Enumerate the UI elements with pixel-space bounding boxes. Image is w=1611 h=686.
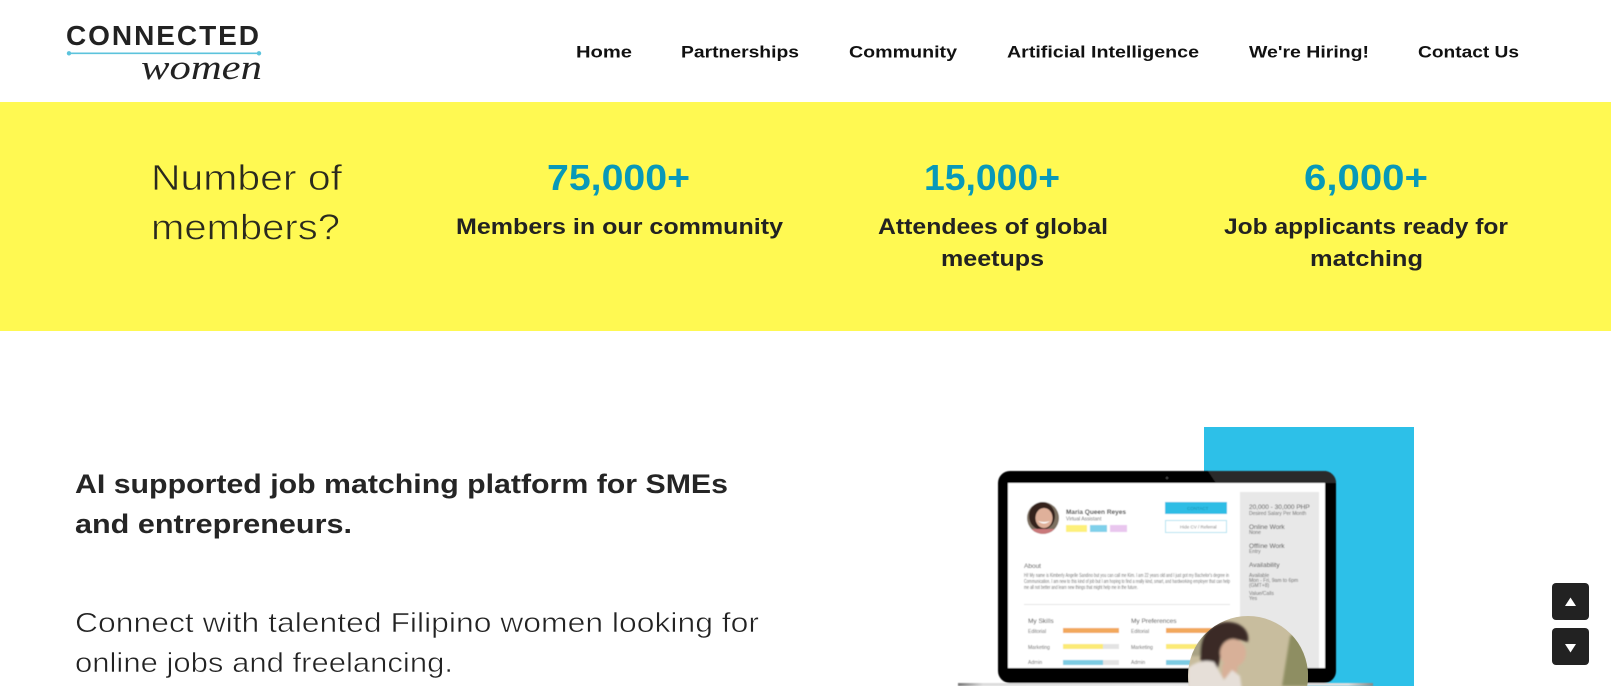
profile name and tags: Maria Queen Reyes — [1066, 509, 1126, 516]
skills and preferences bars: Marketing — [1131, 645, 1153, 651]
navigation menu: Contact Us — [1418, 42, 1519, 62]
text block: connect with Filipino women: Connect with talented Filipino women looking for — [75, 607, 759, 638]
stat: 15,000+ attendees: Attendees of global — [878, 214, 1108, 239]
heading: AI job matching: and entrepreneurs. — [75, 509, 352, 539]
skills and preferences bars: Admin — [1028, 660, 1042, 666]
profile side panel: Availability — [1249, 562, 1280, 569]
profile side panel: Value/Calls — [1249, 591, 1274, 597]
stat: 6,000+ job applicants: Job applicants ready for — [1224, 214, 1508, 239]
scroll to bottom button — [1552, 628, 1589, 665]
panel: yellow stats band — [0, 102, 1611, 331]
profile name and tags — [1066, 509, 1127, 532]
navigation menu: Home — [576, 42, 632, 62]
skills and preferences bars: Admin — [1131, 660, 1145, 666]
navigation menu: Artificial Intelligence — [1007, 42, 1199, 62]
logo: Connected Women: CONNECTED — [66, 20, 259, 51]
stat: 6,000+ job applicants: matching — [1310, 246, 1423, 271]
circular photo: woman working — [1188, 616, 1310, 686]
navigation menu — [576, 42, 1519, 62]
logo: Connected Women — [66, 20, 262, 87]
laptop body — [958, 471, 1373, 686]
stat: 15,000+ attendees: meetups — [941, 246, 1044, 271]
stat: 6,000+ job applicants: 6,000+ — [1304, 157, 1428, 198]
stat: 75,000+ members: Members in our community — [456, 214, 784, 239]
profile side panel: Offline Work — [1249, 543, 1285, 550]
heading: number of members: members? — [151, 206, 340, 248]
contact buttons: Hide CV / Referral — [1180, 524, 1217, 530]
profile side panel: Online Work — [1249, 524, 1285, 531]
navigation menu: We're Hiring! — [1249, 42, 1369, 62]
skills and preferences bars: My Skills — [1028, 618, 1054, 625]
profile side panel: Yes — [1249, 596, 1258, 602]
contact buttons — [1165, 502, 1227, 532]
about section — [1024, 563, 1230, 605]
profile side panel: Entry — [1249, 549, 1261, 555]
profile side panel: 20,000 - 30,000 PHP — [1249, 504, 1310, 511]
skills and preferences bars — [1028, 618, 1222, 666]
text block: connect with Filipino women — [75, 607, 759, 678]
profile side panel: Mon - Fri, 9am to 6pm — [1249, 578, 1298, 584]
navigation menu: Partnerships — [681, 42, 799, 62]
profile photo — [1027, 502, 1059, 535]
about section: About — [1024, 563, 1041, 570]
profile side panel: Desired Salary Per Month — [1249, 511, 1306, 517]
heading: number of members: Number of — [151, 157, 343, 198]
text block: connect with Filipino women: online jobs and freelancing. — [75, 647, 453, 678]
scroll to top button — [1552, 583, 1589, 620]
navigation menu: Community — [849, 42, 958, 62]
skills and preferences bars: Editorial — [1131, 629, 1149, 635]
skills and preferences bars: Editorial — [1028, 629, 1046, 635]
heading: AI job matching: AI supported job matching platform for SMEs — [75, 469, 728, 499]
stat: 15,000+ attendees — [878, 157, 1108, 271]
about section: me all not better and learn new things that might help me in the future. — [1024, 585, 1138, 591]
heading: AI job matching — [75, 469, 728, 539]
about section: Hi! My name is Kimberly Angelle Sandino but you can call me Kim. I am 22 years old and I just got my Bachelor's degree in — [1024, 573, 1229, 579]
stat: 6,000+ job applicants — [1224, 157, 1508, 271]
logo: Connected Women: women — [141, 48, 262, 87]
profile side panel: Available — [1249, 573, 1269, 579]
stat: 75,000+ members: 75,000+ — [547, 157, 690, 198]
profile side panel: None — [1249, 530, 1261, 536]
about section: Communication. I am new to this kind of job but I am hoping to find a really kind, smart, and hardworking employer that can help — [1024, 579, 1230, 585]
skills and preferences bars: Marketing — [1028, 645, 1050, 651]
profile name and tags: Virtual Assistant — [1066, 516, 1102, 522]
profile side panel — [1240, 492, 1319, 668]
stat: 15,000+ attendees: 15,000+ — [924, 157, 1060, 198]
panel: blue backdrop — [1204, 427, 1414, 686]
heading: number of members — [151, 157, 343, 248]
laptop mockup — [958, 471, 1373, 686]
profile side panel: (GMT+8) — [1249, 583, 1269, 589]
skills and preferences bars: My Preferences — [1131, 618, 1177, 625]
stat: 75,000+ members — [456, 157, 784, 239]
contact buttons: CONTACT — [1187, 506, 1209, 511]
